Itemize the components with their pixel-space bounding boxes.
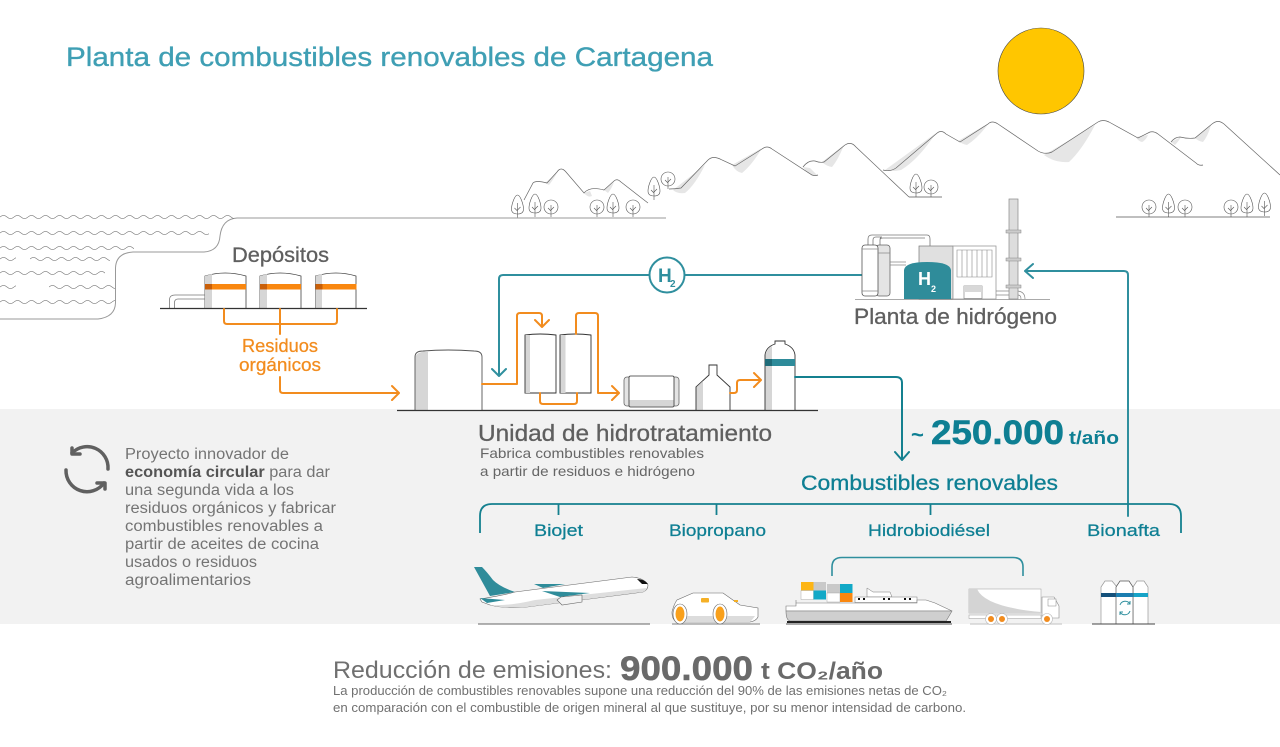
text: circular economy description: partir de aceites de cocina <box>125 536 319 553</box>
icon: truck <box>969 589 1062 624</box>
arrow: hydrogen feed line <box>492 275 649 376</box>
icon: hydrogen plant: H <box>918 269 931 289</box>
orange bracket from tanks <box>224 309 337 334</box>
icon: container ship <box>786 582 952 624</box>
text: circular economy description: combustibles renovables a <box>125 518 323 535</box>
label: Residuos orgánicos: Residuos <box>242 336 318 356</box>
heading: emissions reduction: t CO₂/año <box>761 658 883 685</box>
sun <box>998 28 1084 114</box>
icon: airplane <box>474 567 650 624</box>
heading: Combustibles renovables: Combustibles renovables <box>801 472 1058 495</box>
stat: 250.000 t/año: t/año <box>1069 428 1119 448</box>
icon: H2 circle: H <box>658 266 672 287</box>
text: circular economy description: agroalimentarios <box>125 572 251 589</box>
grey band background <box>0 409 1280 624</box>
text: circular economy description: Proyecto innovador de <box>125 446 289 463</box>
mountains <box>524 120 1280 203</box>
arrow: residues to unit <box>280 377 399 400</box>
icon: H2 circle <box>650 258 684 292</box>
text: circular economy description: usados o residuos <box>125 554 257 571</box>
text: circular economy description: economía circular para dar <box>125 464 330 481</box>
text: unit description: a partir de residuos e hidrógeno <box>480 463 695 479</box>
fuel labels: Bionafta <box>1087 521 1161 540</box>
line: hydrogen plant to circle <box>685 274 862 276</box>
text: circular economy description <box>125 446 336 589</box>
coastline <box>0 218 666 319</box>
fuel labels: Biopropano <box>669 521 766 540</box>
text: emissions description: La producción de combustibles renovables supone una reducción del 90% de las emisiones netas de CO₂ <box>333 684 947 698</box>
text: unit description: Fabrica combustibles renovables <box>480 445 704 461</box>
hidrobiodiesel sub-bracket <box>832 558 1023 576</box>
text: emissions description: en comparación con el combustible de origen mineral al que sustituye, por su menor intensidad de carbono. <box>333 701 966 715</box>
mountain shadows <box>545 123 1211 197</box>
icon: hydrogen plant: 2 <box>931 284 936 294</box>
heading: emissions reduction: 900.000 <box>620 650 753 688</box>
stat: 250.000 t/año: ~ <box>911 422 924 447</box>
icon: storage tanks <box>160 273 367 308</box>
fuels bracket <box>480 504 1181 533</box>
icon: car <box>672 593 760 624</box>
sea waves <box>0 214 234 305</box>
fuel labels <box>534 521 1161 540</box>
icon: bionafta bottles <box>1092 581 1155 624</box>
icon: circular economy arrows <box>66 447 108 492</box>
label: Residuos orgánicos <box>239 336 321 375</box>
hydrotreatment unit equipment <box>397 334 818 410</box>
heading: emissions reduction <box>333 650 883 688</box>
heading: emissions reduction: Reducción de emisiones: <box>333 657 612 684</box>
arrow: column to renewable fuels <box>795 377 909 460</box>
text: emissions description <box>333 684 966 715</box>
heading: Unidad de hidrotratamiento: Unidad de hidrotratamiento <box>478 420 772 446</box>
heading: Depósitos: Depósitos <box>232 244 329 267</box>
orange process flow arrows <box>482 313 761 404</box>
label: Residuos orgánicos: orgánicos <box>239 355 321 375</box>
text: unit description <box>480 445 704 479</box>
title: Planta de combustibles renovables de Cartagena <box>66 42 714 72</box>
fuel labels: Hidrobiodiésel <box>868 521 990 540</box>
heading: Planta de hidrógeno: Planta de hidrógeno <box>854 304 1057 329</box>
fuel labels: Biojet <box>534 521 583 540</box>
mountain outlines <box>524 120 1280 203</box>
icon: hydrogen plant <box>855 199 1050 300</box>
icon: H2 circle: 2 <box>670 279 676 290</box>
stat: 250.000 t/año: 250.000 <box>931 414 1064 452</box>
arrow: bionafta return to hydrogen plant <box>1025 264 1128 516</box>
stat: 250.000 t/año <box>911 414 1119 452</box>
text: circular economy description: una segunda vida a los <box>125 482 294 499</box>
text: circular economy description: residuos orgánicos y fabricar <box>125 500 336 517</box>
trees and ground lines <box>512 172 1270 218</box>
